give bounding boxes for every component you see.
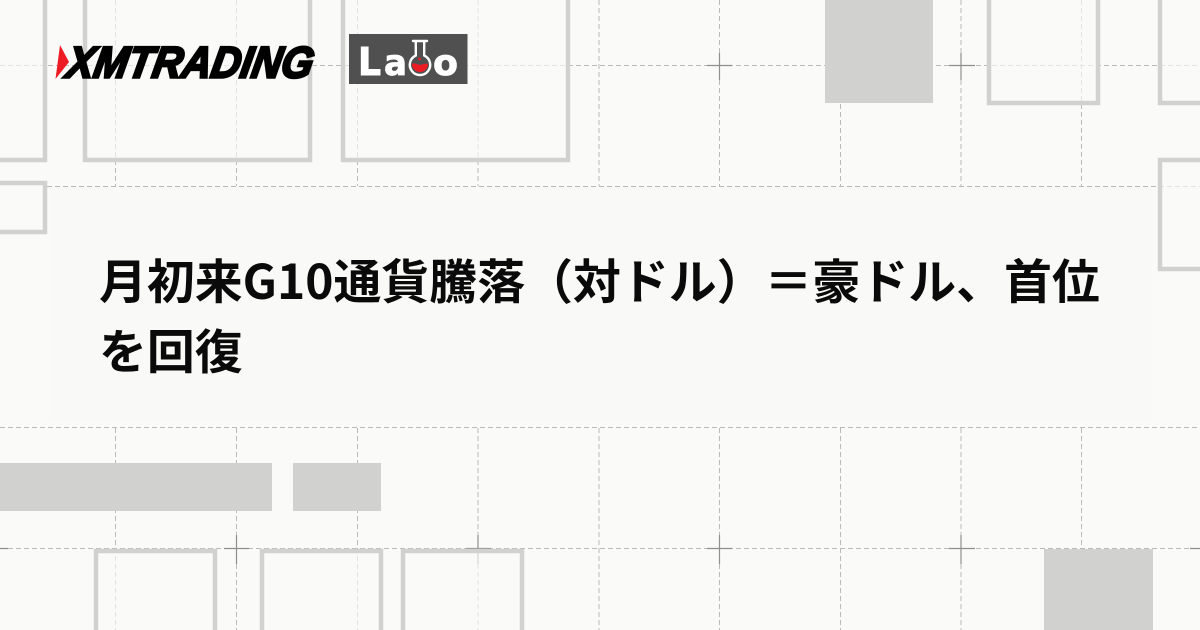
logo: Lab: a <box>384 43 407 84</box>
outline box: left edge small <box>0 183 45 232</box>
outline box: right edge middle <box>1160 160 1200 269</box>
title: 月初来G10通貨騰落（対ドル）＝豪ドル、首位 <box>99 243 1100 313</box>
solid block: bottom right <box>1044 549 1153 630</box>
logo: XMTRADING: XMTRADING <box>61 39 318 87</box>
outline box: top 2 <box>343 0 568 160</box>
outline box: top 1 <box>85 0 310 160</box>
solid block: top <box>825 0 933 103</box>
solid bar: bottom left short <box>293 463 381 511</box>
logo: Lab <box>349 34 468 84</box>
panel: title background <box>50 187 1152 421</box>
outline box: top right edge <box>1160 0 1200 103</box>
outline box: bottom 2 <box>262 551 381 630</box>
logo: Lab: L <box>358 40 381 84</box>
icon: flask <box>410 41 430 75</box>
title <box>99 243 1100 383</box>
title: を回復 <box>99 313 243 383</box>
outline box: bottom 3 <box>403 551 522 630</box>
outline box: top right 1 <box>989 0 1098 103</box>
outline box: top left edge <box>0 0 45 160</box>
outline box: bottom 1 <box>96 551 215 630</box>
solid bar: bottom left long <box>0 463 272 511</box>
logo: Lab: o <box>433 43 458 84</box>
